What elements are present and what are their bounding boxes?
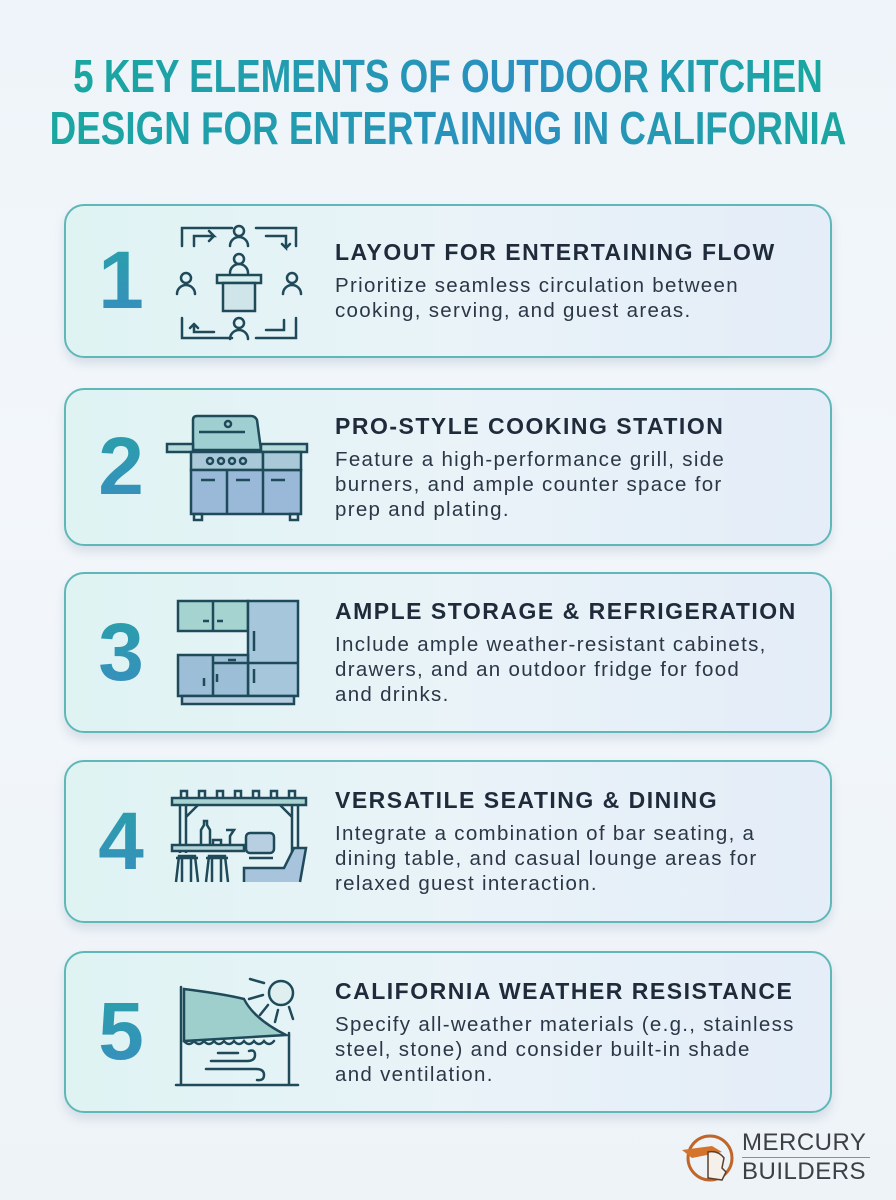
number 4 — [86, 762, 156, 921]
icon: pergola bar seating — [170, 790, 308, 882]
number 2 — [86, 390, 156, 544]
panel: cooking — [64, 388, 832, 546]
text block: relaxed guest interaction. — [335, 872, 598, 895]
number 1 — [86, 206, 156, 356]
panel: layout — [64, 204, 832, 358]
text block: PRO-STYLE COOKING STATION — [335, 412, 724, 438]
panel: storage — [64, 572, 832, 733]
number 2: 2 — [98, 421, 144, 512]
text block: drawers, and an outdoor fridge for food — [335, 658, 740, 681]
title: 5 KEY ELEMENTS OF OUTDOOR KITCHEN — [73, 50, 823, 102]
text block: LAYOUT FOR ENTERTAINING FLOW — [335, 239, 776, 265]
icon: cabinets — [176, 600, 300, 706]
title — [50, 50, 846, 154]
text block: CALIFORNIA WEATHER RESISTANCE — [335, 978, 793, 1004]
logo: MERCURY — [742, 1129, 866, 1156]
text block: and drinks. — [335, 683, 450, 706]
panel: seating — [64, 760, 832, 923]
text block: burners, and ample counter space for — [335, 472, 723, 496]
number 3: 3 — [98, 606, 144, 698]
logo: BUILDERS — [742, 1158, 866, 1185]
icon: layout flow — [176, 224, 302, 340]
text block: AMPLE STORAGE & REFRIGERATION — [335, 598, 797, 624]
number 5 — [86, 953, 156, 1111]
text block: prep and plating. — [335, 498, 510, 520]
text block: steel, stone) and consider built-in shade — [335, 1038, 751, 1060]
text block — [335, 412, 725, 520]
number 1: 1 — [98, 235, 144, 326]
panel: weather — [64, 951, 832, 1113]
text block: Feature a high-performance grill, side — [335, 448, 725, 470]
text block — [335, 978, 795, 1086]
number 4: 4 — [98, 796, 144, 886]
number 3 — [86, 574, 156, 731]
number 5: 5 — [98, 986, 144, 1077]
title: DESIGN FOR ENTERTAINING IN CALIFORNIA — [50, 102, 846, 154]
text block — [335, 598, 797, 706]
text block: and ventilation. — [335, 1062, 494, 1086]
text block: dining table, and casual lounge areas for — [335, 847, 758, 870]
icon: shade sail, sun and wind — [174, 978, 300, 1086]
text block: Integrate a combination of bar seating, a — [335, 822, 755, 845]
text block: Specify all-weather materials (e.g., stainless — [335, 1012, 795, 1036]
text block — [335, 787, 758, 895]
text block: Prioritize seamless circulation between — [335, 274, 739, 297]
text block: VERSATILE SEATING & DINING — [335, 787, 718, 813]
icon: grill — [166, 414, 308, 522]
text block — [335, 239, 776, 322]
text block: cooking, serving, and guest areas. — [335, 299, 691, 322]
text block: Include ample weather-resistant cabinets, — [335, 633, 767, 656]
logo — [682, 1129, 870, 1185]
